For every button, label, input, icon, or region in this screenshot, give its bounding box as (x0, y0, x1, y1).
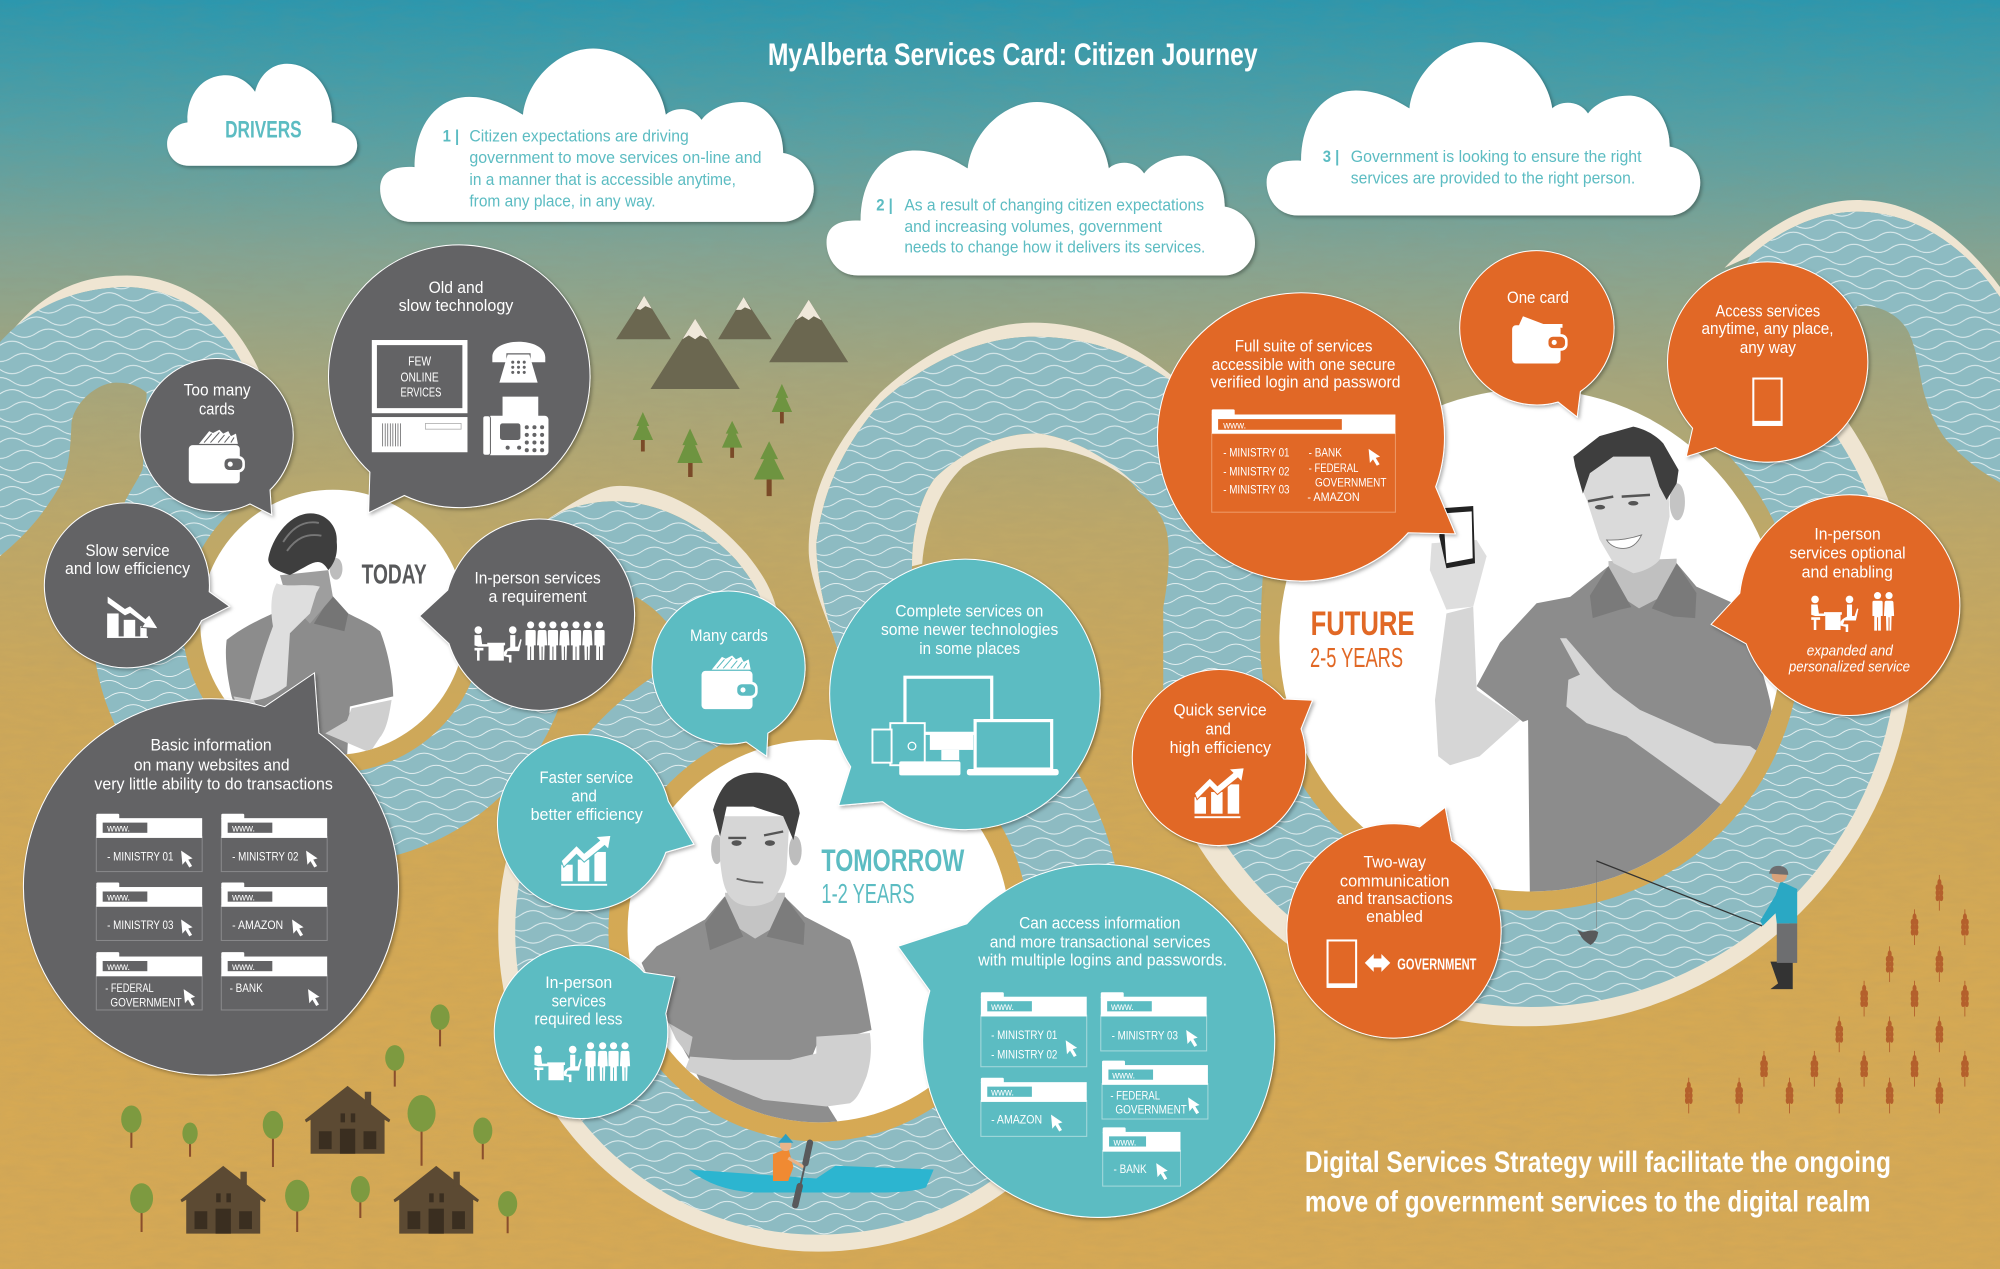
circle: future portrait backdrop (1260, 370, 1801, 911)
website cards: - MINISTRY 02 (232, 850, 299, 864)
river: big arch inner cream bank (912, 433, 1149, 566)
bubble text: services (552, 991, 606, 1010)
bubble text: Many cards (690, 626, 768, 645)
label: future (1310, 605, 1415, 673)
bubble text: Basic information (151, 735, 272, 754)
website cards: www. (1111, 1070, 1135, 1081)
website card: GOVERNMENT (1315, 475, 1387, 489)
icon: wallet with one card (1512, 316, 1568, 363)
label: tomorrow (821, 842, 965, 909)
river: future ring cream bank (1186, 431, 1899, 1011)
river: ring around future (1213, 414, 1849, 958)
label: government: GOVERNMENT (1397, 956, 1477, 973)
closing statement: move of government services to the digital realm (1305, 1186, 1871, 1219)
bubble: quick service (1132, 670, 1312, 846)
bubble text: enabled (1366, 907, 1423, 926)
river: right arch (1716, 212, 2000, 487)
bubble text (184, 380, 251, 418)
website cards: GOVERNMENT (1115, 1102, 1187, 1116)
icon: wallet (189, 430, 245, 483)
bubble: in-person a requirement (420, 519, 635, 710)
website cards: www. (231, 892, 255, 903)
bubble text: and enabling (1802, 563, 1893, 582)
website cards: www. (231, 962, 255, 973)
note: expanded service: personalized service (1788, 660, 1910, 676)
wheat field (1685, 875, 1969, 1113)
bubble text: high efficiency (1170, 738, 1272, 757)
website cards: www. (990, 1002, 1014, 1013)
website cards: GOVERNMENT (110, 995, 182, 1009)
website cards: - MINISTRY 03 (107, 918, 174, 932)
website cards (981, 992, 1208, 1186)
bubble text: Two-way (1364, 852, 1427, 871)
website cards: - FEDERAL (105, 981, 154, 995)
website cards: www. (106, 892, 130, 903)
bubble text: Too many (184, 380, 251, 399)
bubble text: and (571, 786, 597, 805)
bubble text (399, 278, 514, 315)
bubble: slow service (44, 503, 230, 668)
label: today: TODAY (362, 558, 427, 589)
website cards: www. (106, 962, 130, 973)
mountains (616, 296, 848, 389)
website card: - MINISTRY 01 (1223, 445, 1290, 459)
icon: rising chart (561, 835, 611, 886)
icon: desk and queue (474, 621, 605, 663)
label: tomorrow: 1-2 YEARS (821, 878, 915, 909)
icon: computer: FEW (408, 353, 431, 368)
bubble: full suite of services (1157, 293, 1455, 581)
bubble text: and low efficiency (65, 559, 191, 578)
bubble text (977, 913, 1227, 969)
bubble: faster service (497, 735, 694, 911)
driver 2 text: needs to change how it delivers its services. (904, 238, 1205, 257)
village: houses and trees (121, 1004, 517, 1234)
bubble: two-way communication (1287, 807, 1501, 1038)
label: future: 2-5 YEARS (1310, 642, 1403, 673)
website cards: - FEDERAL (1110, 1088, 1160, 1102)
website cards: - AMAZON (232, 918, 283, 932)
icon: computer (372, 343, 467, 452)
bubble text: One card (1507, 288, 1569, 307)
website card: www. (1222, 421, 1246, 432)
circle: today portrait backdrop (182, 472, 483, 773)
bubble text (1337, 852, 1453, 926)
driver 3 text: 3 | (1323, 147, 1339, 166)
bubble text: Complete services on (895, 602, 1043, 621)
website card: - AMAZON (1307, 490, 1360, 504)
bubble text: communication (1340, 871, 1450, 890)
bubble text: In-person (1814, 524, 1881, 543)
bubble text (1170, 700, 1272, 757)
icon: wallet (702, 656, 758, 709)
kayak with paddler (689, 1134, 934, 1205)
icon: devices (872, 677, 1059, 775)
website cards: www. (990, 1088, 1014, 1099)
bubble: one card (1460, 251, 1614, 417)
bubble: old and slow technology (329, 245, 590, 513)
title: MyAlberta Services Card: Citizen Journey (768, 36, 1258, 72)
driver 3 text (1323, 147, 1642, 188)
bubble text: very little ability to do transactions (94, 774, 333, 793)
cloud: driver 3 (1267, 42, 1700, 216)
website card: - FEDERAL (1309, 461, 1359, 475)
website card (1212, 409, 1395, 512)
bubble: in-person optional (1711, 495, 1960, 715)
website cards: - BANK (230, 981, 263, 995)
note: expanded service (1788, 644, 1910, 676)
bubble text (1210, 337, 1401, 392)
portrait: smiling man future (1430, 427, 1773, 906)
bubble text: any way (1740, 338, 1797, 357)
closing statement: Digital Services Strategy will facilitate the ongoing (1305, 1146, 1891, 1179)
icon: rising chart (1195, 768, 1244, 818)
website cards (96, 814, 327, 1010)
website card: - MINISTRY 02 (1223, 464, 1290, 478)
bubble text (1702, 301, 1834, 357)
website cards: www. (1110, 1002, 1134, 1013)
river: middle arch cream bank (546, 486, 777, 625)
bubble text (881, 602, 1058, 658)
bubble text: and transactions (1337, 889, 1453, 908)
cloud: driver 2 (827, 102, 1255, 275)
icon: computer: ERVICES (401, 385, 441, 400)
bubble text (65, 541, 191, 578)
circle: tomorrow portrait backdrop (608, 721, 1029, 1141)
driver 3 text: services are provided to the right person. (1351, 169, 1635, 188)
bubble: too many cards (140, 358, 293, 515)
bubble: in-person required less (494, 945, 675, 1119)
river: left arch cream bank (0, 275, 259, 370)
bubble text: and (1205, 720, 1231, 739)
driver 1 text: government to move services on-line and (469, 148, 761, 167)
driver 3 text: Government is looking to ensure the right (1351, 147, 1642, 166)
river: big arch cream bank (809, 323, 1180, 676)
label: tomorrow: TOMORROW (821, 842, 965, 878)
bubble text: accessible with one secure (1212, 355, 1395, 374)
driver 1 text: 1 | (443, 127, 459, 146)
river: big arch (816, 337, 1263, 778)
bubble text: Faster service (540, 768, 633, 787)
website cards: www. (231, 824, 255, 835)
icon: tablet (1753, 379, 1782, 425)
bubble text: In-person services (474, 569, 601, 588)
bubble text (1790, 524, 1906, 582)
fisherman (1577, 861, 1797, 989)
bubble text: In-person (545, 973, 612, 992)
river: middle arch (434, 501, 769, 714)
driver 1 text: Citizen expectations are driving (469, 127, 689, 146)
bubble: access services (1668, 262, 1868, 462)
website cards: - MINISTRY 01 (991, 1028, 1058, 1042)
bubble text: better efficiency (531, 805, 644, 824)
bubble text: Can access information (1019, 913, 1180, 932)
website card: - MINISTRY 03 (1223, 483, 1290, 497)
river: ring around tomorrow (565, 693, 1073, 1185)
river: left arch (0, 287, 283, 666)
bubble: many cards (652, 591, 805, 756)
pine trees (633, 384, 792, 496)
website cards: www. (1113, 1137, 1136, 1148)
bubble text: verified login and password (1210, 373, 1401, 392)
closing statement (1305, 1146, 1891, 1219)
bubble text: Quick service (1173, 700, 1267, 719)
website cards: www. (106, 824, 130, 835)
bubble text (474, 569, 601, 606)
icon: desk and short queue (534, 1042, 630, 1082)
bubble text: some newer technologies (881, 620, 1058, 639)
bubble text: anytime, any place, (1702, 319, 1834, 338)
bubble text: required less (534, 1010, 622, 1029)
icon: declining chart (107, 596, 158, 638)
icon: computer: ONLINE (401, 369, 439, 384)
river: ring around today (138, 542, 529, 818)
heading: drivers: DRIVERS (225, 117, 302, 143)
bubble text (94, 735, 333, 793)
icon: fax machine (483, 397, 548, 455)
bubble: basic information (23, 673, 398, 1075)
bubble text: Access services (1716, 301, 1820, 320)
portrait: frustrated man today (226, 513, 393, 765)
icon: double arrow (1365, 954, 1390, 972)
website cards: - AMAZON (991, 1113, 1042, 1127)
driver 2 text (876, 195, 1205, 257)
bubble text: on many websites and (134, 755, 290, 774)
bubble text: cards (199, 399, 235, 418)
bubble text: in some places (919, 639, 1020, 658)
label: future: FUTURE (1311, 605, 1415, 643)
river: right arch cream bank (1724, 200, 2000, 300)
bubble text: Full suite of services (1235, 337, 1372, 356)
bubble text (531, 768, 644, 824)
bubble text: and more transactional services (990, 933, 1210, 952)
river: tomorrow ring cream bank (507, 851, 1020, 1243)
note: expanded service: expanded and (1807, 644, 1894, 660)
website cards: - MINISTRY 03 (1112, 1028, 1178, 1042)
website cards: - MINISTRY 02 (991, 1048, 1058, 1062)
icon: telephone (492, 342, 545, 383)
bubble: can access information (898, 864, 1275, 1217)
bubble: complete services (830, 559, 1100, 830)
bubble text: services optional (1790, 544, 1906, 563)
bubble text: a requirement (489, 587, 587, 606)
cloud: drivers (167, 64, 357, 166)
portrait: thinking man tomorrow (642, 773, 872, 1129)
bubble text: with multiple logins and passwords. (977, 950, 1227, 969)
driver 1 text: in a manner that is accessible anytime, (469, 170, 736, 189)
bubble text (534, 973, 622, 1029)
bubble text: Slow service (85, 541, 170, 560)
icon: tablet (1328, 940, 1356, 988)
website cards: - MINISTRY 01 (107, 850, 174, 864)
icon: desk and two people (1811, 592, 1894, 632)
driver 1 text (443, 127, 761, 211)
driver 2 text: As a result of changing citizen expectations (904, 195, 1204, 214)
driver 2 text: and increasing volumes, government (904, 217, 1162, 236)
website cards: - BANK (1114, 1162, 1147, 1176)
bubble text: Old and (429, 278, 483, 297)
driver 2 text: 2 | (876, 195, 893, 214)
cloud: driver 1 (380, 48, 814, 222)
driver 1 text: from any place, in any way. (469, 192, 656, 211)
bubble text: slow technology (399, 296, 514, 315)
website card: - BANK (1309, 445, 1342, 459)
